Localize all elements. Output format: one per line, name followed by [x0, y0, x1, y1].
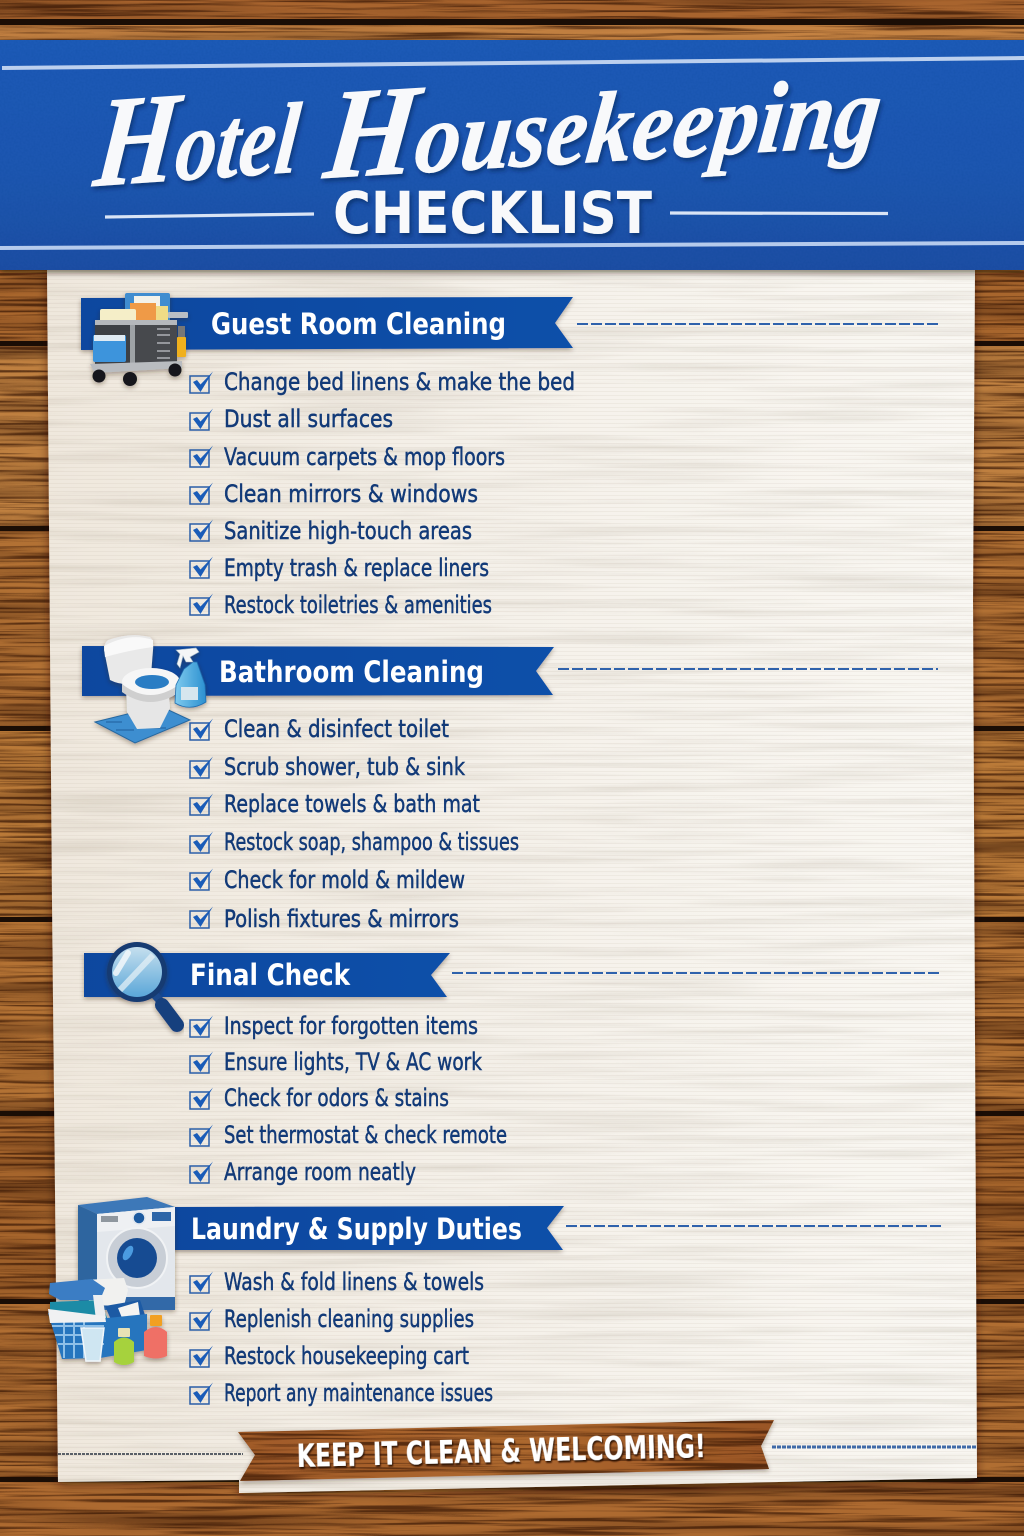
heading ribbon: Bathroom Cleaning: Bathroom Cleaning	[219, 655, 484, 689]
heading ribbon: Laundry & Supply Duties: Laundry & Supply Duties	[191, 1212, 522, 1246]
heading ribbon: Guest Room Cleaning: Guest Room Cleaning	[211, 307, 506, 341]
section: Bathroom Cleaning	[82, 635, 938, 933]
title: Hotel Housekeeping: Housekeeping	[318, 30, 890, 206]
icon: toilet and spray bottle	[95, 635, 206, 743]
checklist: final check items: Check for odors & stains	[224, 1084, 449, 1112]
checklist: guest room items: Restock toiletries & amenities	[224, 591, 492, 619]
checklist: laundry items: Restock housekeeping cart	[224, 1342, 469, 1370]
checklist: laundry items	[190, 1268, 493, 1407]
checklist: guest room items	[190, 368, 575, 619]
checklist: bathroom items	[190, 715, 519, 933]
bottom stitched lines	[58, 1447, 976, 1454]
checklist: final check items: Inspect for forgotten items	[224, 1012, 478, 1040]
checklist: laundry items: Wash & fold linens & towels	[224, 1268, 484, 1296]
checklist: final check items	[190, 1012, 507, 1186]
checklist: bathroom items: Scrub shower, tub & sink	[224, 753, 465, 781]
checklist: guest room items: Clean mirrors & windows	[224, 480, 478, 508]
stitched dashed line	[566, 1225, 942, 1227]
section: Final Check	[84, 942, 940, 1186]
icon: magnifying glass	[107, 942, 177, 1025]
checklist: guest room items: Change bed linens & make the bed	[224, 368, 575, 396]
section: Guest Room Cleaning	[81, 293, 940, 619]
checklist: guest room items: Vacuum carpets & mop floors	[224, 443, 505, 471]
section: Laundry & Supply Duties	[48, 1197, 942, 1407]
icon: washing machine and laundry basket	[48, 1197, 175, 1365]
checklist: guest room items: Empty trash & replace liners	[224, 554, 489, 582]
checklist: bathroom items: Polish fixtures & mirrors	[224, 905, 459, 933]
checklist: bathroom items: Restock soap, shampoo & tissues	[224, 828, 519, 856]
stitched dashed line	[452, 972, 940, 974]
heading ribbon: Final Check: Final Check	[190, 958, 351, 992]
checklist: final check items: Ensure lights, TV & AC work	[224, 1048, 482, 1076]
checklist: laundry items: Report any maintenance issues	[224, 1379, 493, 1407]
heading ribbon: Final Check	[84, 953, 450, 997]
checklist: bathroom items: Check for mold & mildew	[224, 866, 465, 894]
checklist: final check items: Arrange room neatly	[224, 1158, 416, 1186]
checklist: final check items: Set thermostat & check remote	[224, 1121, 507, 1149]
heading ribbon: Bathroom Cleaning	[82, 646, 554, 696]
icon: housekeeping cart	[90, 293, 188, 386]
panel: cloth checklist sheet	[40, 268, 985, 1498]
stitched dashed line	[577, 323, 940, 325]
title: Hotel Housekeeping	[88, 30, 890, 214]
heading ribbon: Laundry & Supply Duties	[172, 1206, 564, 1250]
footer text: KEEP IT CLEAN & WELCOMING!	[296, 1427, 706, 1475]
checklist: bathroom items: Clean & disinfect toilet	[224, 715, 449, 743]
subtitle: CHECKLIST: CHECKLIST	[333, 179, 652, 247]
checklist: guest room items: Dust all surfaces	[224, 405, 393, 433]
title banner	[0, 30, 1024, 270]
checklist: guest room items: Sanitize high-touch areas	[224, 517, 472, 545]
checklist: laundry items: Replenish cleaning supplies	[224, 1305, 474, 1333]
stitched dashed line	[558, 668, 938, 670]
heading ribbon: Guest Room Cleaning	[81, 297, 573, 350]
title: Hotel Housekeeping: Hotel	[88, 57, 308, 214]
checklist: bathroom items: Replace towels & bath mat	[224, 790, 480, 818]
footer wood ribbon	[230, 1415, 780, 1485]
